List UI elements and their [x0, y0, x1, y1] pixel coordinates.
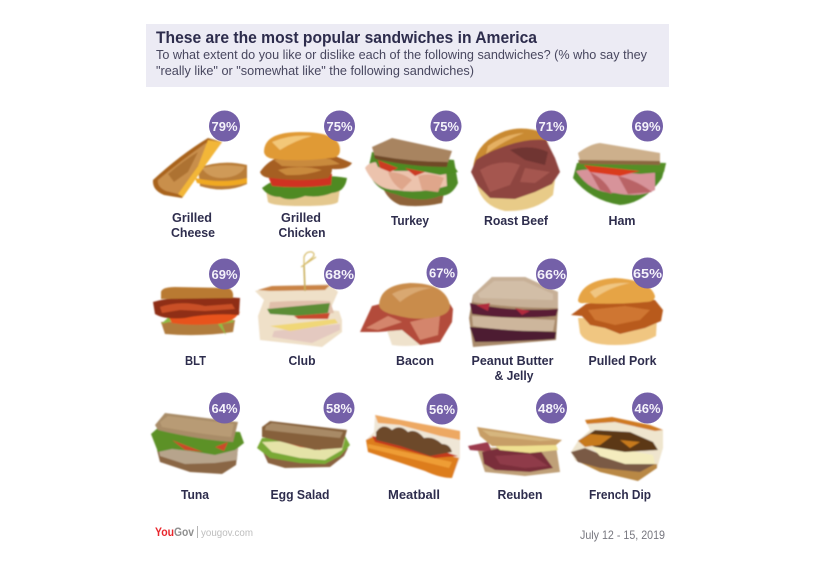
label: French Dip — [589, 487, 651, 502]
item: Grilled Chicken — [260, 110, 355, 240]
item: Roast Beef — [471, 110, 567, 228]
label — [171, 210, 215, 240]
item: French Dip — [571, 392, 663, 502]
label: BLT — [185, 353, 206, 368]
date: July 12 - 15, 2019 — [580, 528, 665, 542]
badge: 75% — [326, 119, 353, 134]
badge: 64% — [212, 401, 238, 416]
icon: BLT sandwich — [153, 287, 240, 335]
item: Turkey — [365, 110, 462, 228]
label — [472, 353, 554, 383]
item: Peanut Butter and Jelly — [469, 258, 567, 383]
logo: YouGov — [155, 526, 253, 539]
label: Club — [288, 353, 316, 368]
icon: ham sandwich — [573, 143, 666, 205]
header panel — [146, 24, 669, 87]
logo: YouGov: Gov — [174, 527, 195, 539]
label: & Jelly — [494, 368, 534, 383]
icon: meatball sandwich — [366, 415, 460, 478]
item: Egg Salad — [257, 392, 354, 502]
label: Tuna — [181, 487, 210, 502]
badge: 58% — [326, 401, 352, 416]
label: Cheese — [171, 225, 215, 240]
label — [278, 210, 326, 240]
label: Reuben — [498, 487, 543, 502]
badge: 56% — [429, 402, 455, 417]
label: Peanut Butter — [472, 353, 554, 368]
icon: bacon sandwich — [360, 283, 453, 346]
badge: 66% — [537, 267, 566, 282]
icon: french dip sandwich — [571, 417, 663, 481]
subtitle: To what extent do you like or dislike each of the following sandwiches? (% who say they — [156, 48, 648, 62]
title: These are the most popular sandwiches in America — [156, 29, 538, 47]
label: Grilled — [172, 210, 212, 225]
item: Reuben — [468, 392, 567, 502]
item: Ham — [573, 110, 666, 228]
icon: grilled cheese — [153, 138, 247, 198]
label: Ham — [608, 213, 636, 228]
item: Meatball — [366, 394, 460, 502]
label: Bacon — [396, 353, 434, 368]
item: Tuna — [151, 392, 244, 502]
item: BLT — [153, 258, 240, 368]
subtitle: "really like" or "somewhat like" the following sandwiches) — [156, 64, 474, 78]
badge: 65% — [633, 266, 662, 281]
item: Grilled Cheese — [153, 110, 247, 240]
badge: 46% — [634, 401, 661, 416]
icon: egg salad sandwich — [257, 421, 350, 468]
icon: club sandwich — [255, 252, 342, 347]
badge: 69% — [634, 119, 661, 134]
badge: 48% — [538, 401, 565, 416]
icon: peanut butter and jelly sandwich — [469, 277, 558, 347]
label: Chicken — [278, 225, 326, 240]
label: Roast Beef — [484, 213, 549, 228]
badge: 79% — [212, 119, 238, 134]
label: Egg Salad — [270, 487, 330, 502]
icon: roast beef sandwich — [471, 128, 560, 211]
icon: reuben sandwich — [468, 427, 562, 476]
logo: YouGov: You — [155, 527, 174, 539]
icon: grilled chicken — [260, 132, 352, 206]
badge: 68% — [325, 267, 354, 282]
item: Club — [255, 252, 355, 368]
label: Meatball — [388, 487, 440, 502]
icon: turkey sandwich — [365, 138, 458, 206]
item: Bacon — [360, 257, 458, 368]
badge: 71% — [538, 119, 565, 134]
item: Pulled Pork — [571, 258, 663, 368]
label: Turkey — [391, 213, 430, 228]
badge: 69% — [212, 267, 238, 282]
subtitle — [156, 48, 648, 78]
icon: pulled pork sandwich — [571, 278, 663, 345]
icon: tuna sandwich — [151, 413, 244, 474]
logo: YouGov: yougov.com — [201, 528, 253, 539]
badge: 67% — [429, 266, 455, 280]
label: Pulled Pork — [588, 353, 657, 368]
badge: 75% — [433, 119, 459, 134]
label: Grilled — [281, 210, 321, 225]
